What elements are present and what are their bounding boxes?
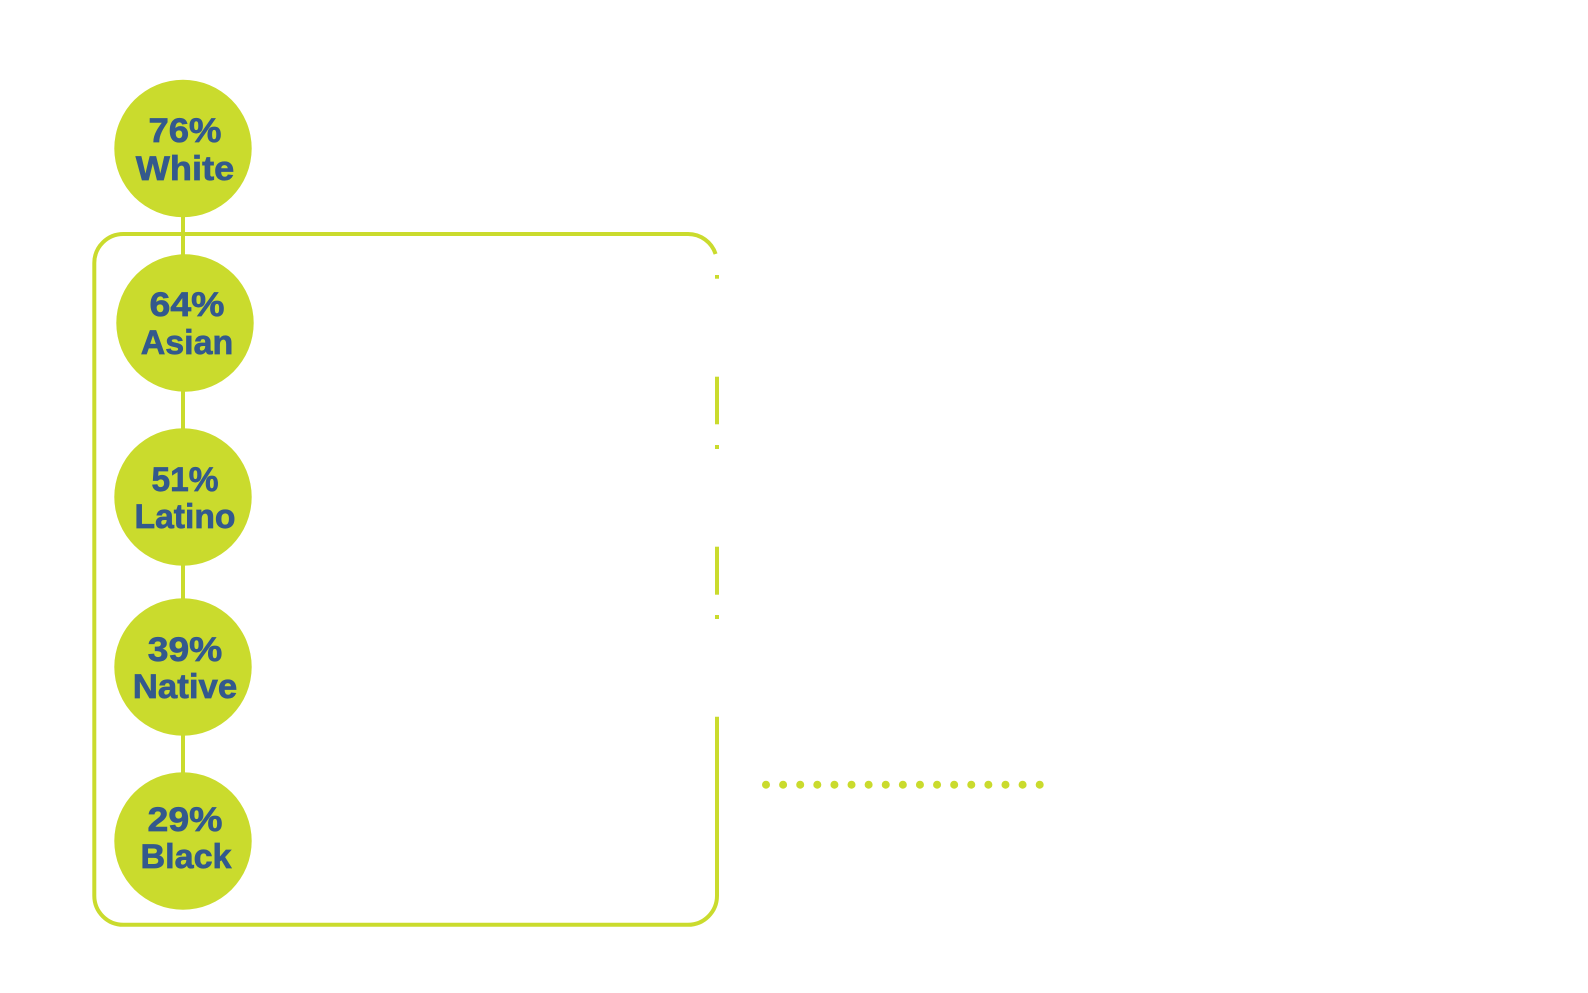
circle: 76% White: White <box>136 150 234 188</box>
circle: 39% Native: 39% <box>148 631 222 669</box>
connector line linking the circles <box>181 210 185 850</box>
dotted leader line <box>766 781 1040 789</box>
circle: 51% Latino: 51% <box>152 461 218 499</box>
circle: 76% White <box>114 80 252 217</box>
circle: 29% Black: Black <box>140 838 232 876</box>
frame right side: broken segments <box>715 275 719 619</box>
circle: 51% Latino: Latino <box>134 498 236 536</box>
bracket frame: rounded outline grouping non-white groups <box>94 234 717 925</box>
circle: 51% Latino <box>114 428 252 566</box>
circle: 39% Native <box>114 598 252 736</box>
circle: 64% Asian: 64% <box>150 286 224 324</box>
circle: 76% White: 76% <box>148 112 222 150</box>
circle: 29% Black: 29% <box>148 801 222 839</box>
circle: 39% Native: Native <box>133 668 237 706</box>
circle: 64% Asian: Asian <box>141 324 233 362</box>
circle: 64% Asian <box>116 254 254 392</box>
circle: 29% Black <box>114 772 252 910</box>
